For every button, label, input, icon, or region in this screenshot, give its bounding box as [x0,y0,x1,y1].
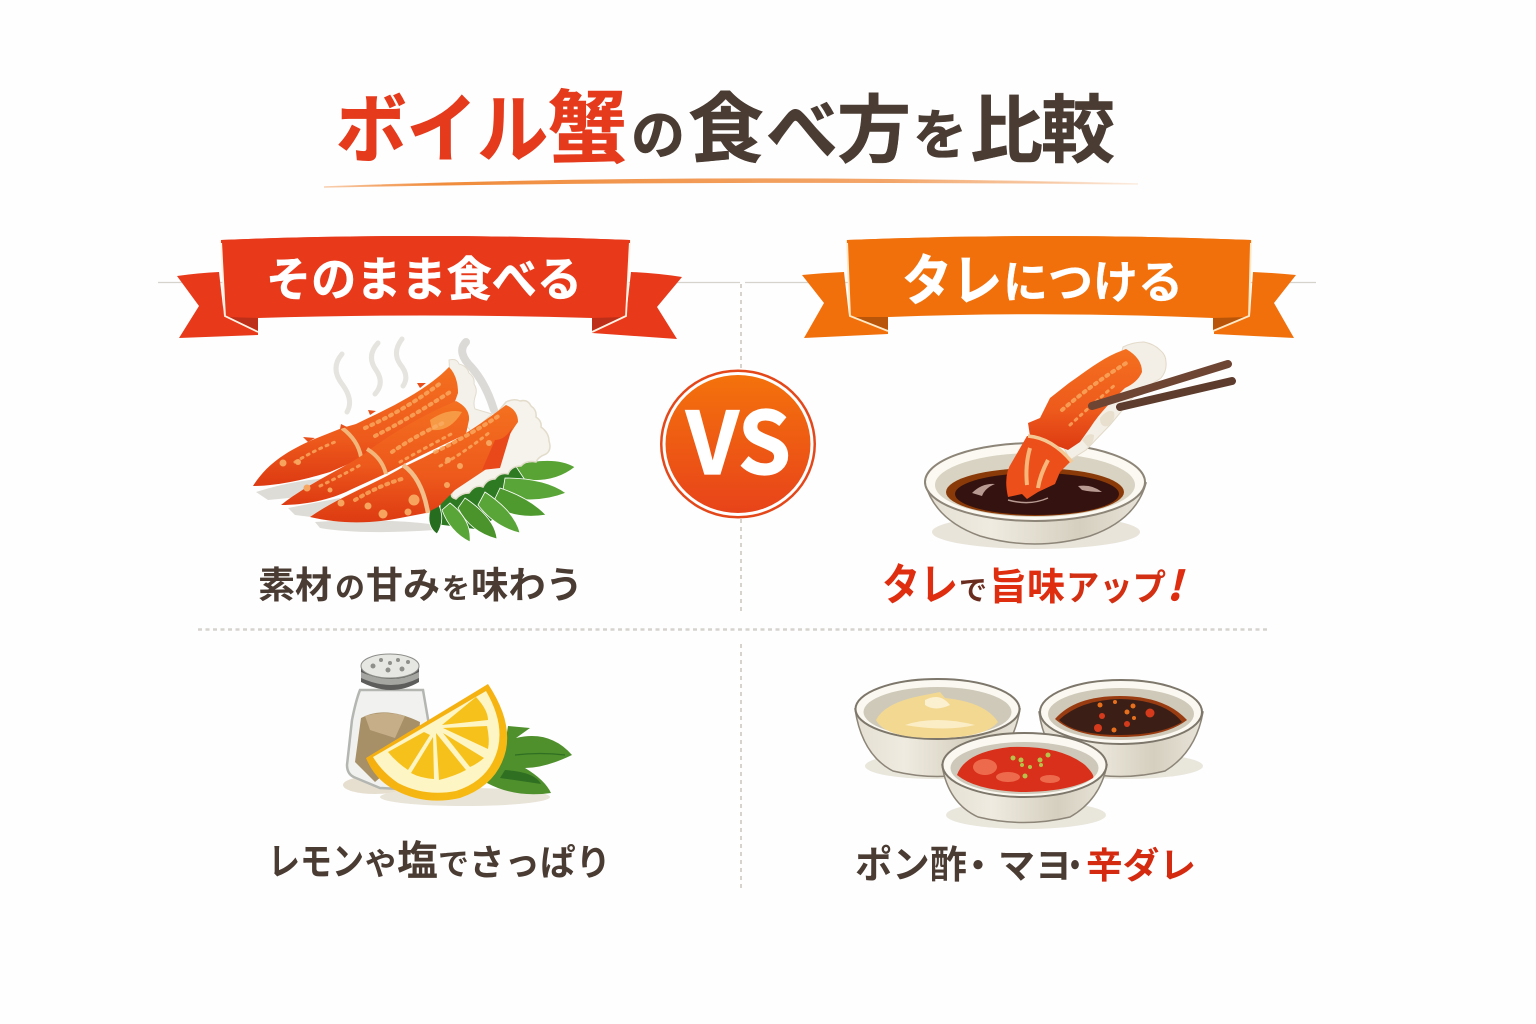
caption: straight [258,555,583,609]
leaves [487,726,572,794]
front leg [310,405,518,522]
chili sauce [957,747,1093,792]
banner label: straight: そのまま食べる [266,241,582,310]
banner label: sauce: につける [1003,246,1183,311]
caption: lemon and salt: や [365,839,396,884]
lemon segments [388,697,489,780]
title: 比 [970,72,1043,178]
steam [336,339,494,412]
caption: sauce: 旨味 [989,556,1065,611]
caption: sauce: ! [1167,554,1185,612]
dipping sauce [946,468,1124,516]
VS badge [660,370,816,518]
title: ボイル [336,69,548,178]
mayo bowl [855,679,1020,776]
ground shadows [343,776,407,794]
banner label: sauce: タレ [902,236,1002,316]
VS badge: VS [685,374,791,499]
title: 較 [1041,71,1115,178]
plate shadow [256,478,435,532]
fold: right [592,316,626,332]
caption: straight: 素材 [258,555,332,609]
caption: straight: を [442,567,470,607]
banner label: sauce [902,236,1183,316]
leg meat [1060,342,1166,460]
middle leg [281,401,469,505]
fold: left [850,316,888,331]
caption: lemon and salt: レモン [268,831,364,886]
title: を [913,91,967,170]
title: 蟹 [548,64,627,179]
caption: sauces: ・ [960,837,996,889]
caption: lemon and salt: さっぱり [469,834,611,886]
chili soy bowl [1039,680,1203,776]
leg shell [1028,349,1142,450]
illustration: three sauce bowls [855,679,1203,829]
shaker body [347,690,429,790]
garnish leaves [429,455,575,542]
top leg [253,367,458,486]
claw [1006,436,1072,499]
caption: sauces [855,834,1196,889]
illustration: dipping crab leg [925,342,1232,549]
caption: lemon and salt: で [438,839,469,884]
title: 食 [688,68,764,178]
caption: sauces: 辛ダレ [1086,837,1196,889]
top leg meat [449,360,492,432]
dish [925,483,1146,544]
soy sauce [1055,696,1187,737]
lemon wedge [366,684,507,801]
mayonnaise [876,692,998,738]
caption: sauces: ・ [1060,837,1090,889]
seasoning [355,712,420,782]
caption: sauces: マヨ [998,837,1072,889]
title underline [324,179,1138,187]
banner: with sauce [802,236,1296,338]
caption: straight: 甘み [366,555,440,609]
dish shadow [932,515,1140,549]
bowl shadows [865,753,1005,779]
caption: lemon and salt [268,827,611,887]
lower chopstick [1120,381,1232,407]
upper chopstick [1092,364,1228,406]
caption: straight: 味わう [471,555,583,609]
title: 方 [837,71,911,178]
shaker cap [361,665,419,690]
illustration: salt shaker and lemon [343,654,572,806]
title: の [631,91,685,170]
caption: sauce: アップ [1066,559,1166,611]
shell spots [280,440,492,518]
caption: sauces: ポン酢 [855,834,967,889]
fold: right [1213,316,1250,331]
caption: straight: の [335,563,365,607]
banner: straight eating [177,236,682,339]
meat bumps [1082,411,1114,447]
caption: sauce: タレ [882,549,958,613]
chili bowl [942,733,1107,822]
illustration: boiled crab legs [253,339,575,542]
caption: lemon and salt: 塩 [397,827,438,887]
caption: sauce [882,549,1185,613]
caption: sauce: で [959,569,987,609]
fold: left [224,316,258,332]
top leg spikes [303,383,426,442]
title: べ [766,72,838,177]
title [336,64,1115,179]
front leg meat frill [450,400,550,499]
